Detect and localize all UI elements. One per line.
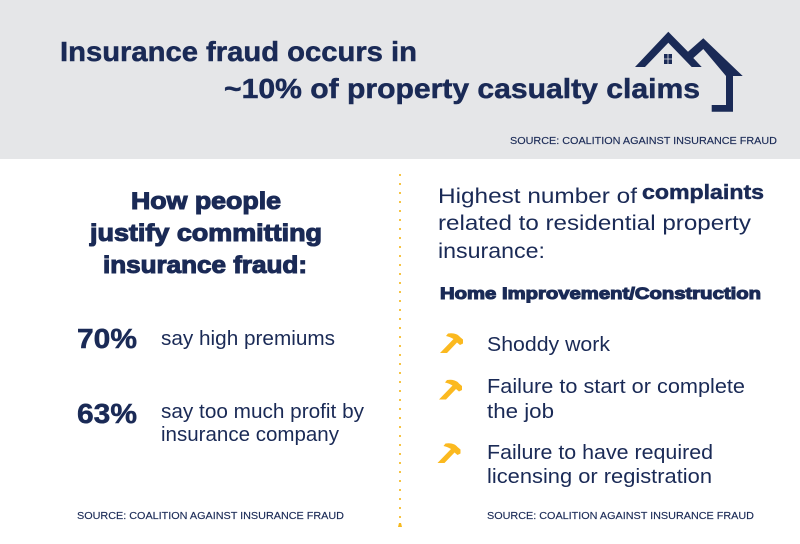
stat: 70 percent: say high premiums [161, 328, 335, 350]
list item: failure to have licensing: Failure to have required [487, 442, 713, 464]
title: ~10% of property casualty claims [224, 73, 700, 104]
right intro text: related to residential property [438, 212, 752, 235]
divider [398, 174, 402, 527]
list item: shoddy work [440, 333, 611, 356]
panel: header band [0, 0, 800, 159]
list item: failure to start [439, 376, 745, 423]
left source: SOURCE: COALITION AGAINST INSURANCE FRAUD [77, 510, 344, 522]
right source: SOURCE: COALITION AGAINST INSURANCE FRAUD [487, 510, 754, 522]
stat: 70 percent [77, 323, 335, 354]
right intro text: insurance: [438, 240, 545, 263]
list item: failure to start: the job [487, 401, 554, 423]
header source: SOURCE: COALITION AGAINST INSURANCE FRAUD [510, 135, 777, 147]
list item: failure to have licensing: licensing or registration [487, 466, 712, 488]
title: Insurance fraud occurs in [60, 36, 417, 67]
stat: 63 percent: insurance company [161, 424, 339, 446]
stat: 63 percent: 63% [77, 398, 137, 429]
right intro text: complaints [642, 181, 764, 204]
list item: failure to start: Failure to start or complete [487, 376, 745, 398]
icon: hammer [440, 333, 463, 353]
left heading: justify committing [89, 220, 322, 247]
title [60, 36, 700, 104]
right intro text: Highest number of [438, 185, 637, 208]
stat: 63 percent [77, 398, 364, 446]
right intro text [438, 181, 764, 263]
icon: house outline [635, 32, 743, 112]
right subheading: Home Improvement/Construction [440, 284, 761, 303]
list item: shoddy work: Shoddy work [487, 334, 611, 356]
left heading [89, 188, 322, 279]
list item: failure to have licensing [438, 442, 713, 488]
left heading: How people [131, 188, 281, 215]
icon: hammer [438, 443, 460, 463]
left heading: insurance fraud: [103, 252, 307, 279]
icon: hammer [439, 380, 462, 400]
stat: 70 percent: 70% [77, 323, 137, 354]
stat: 63 percent: say too much profit by [161, 401, 364, 423]
